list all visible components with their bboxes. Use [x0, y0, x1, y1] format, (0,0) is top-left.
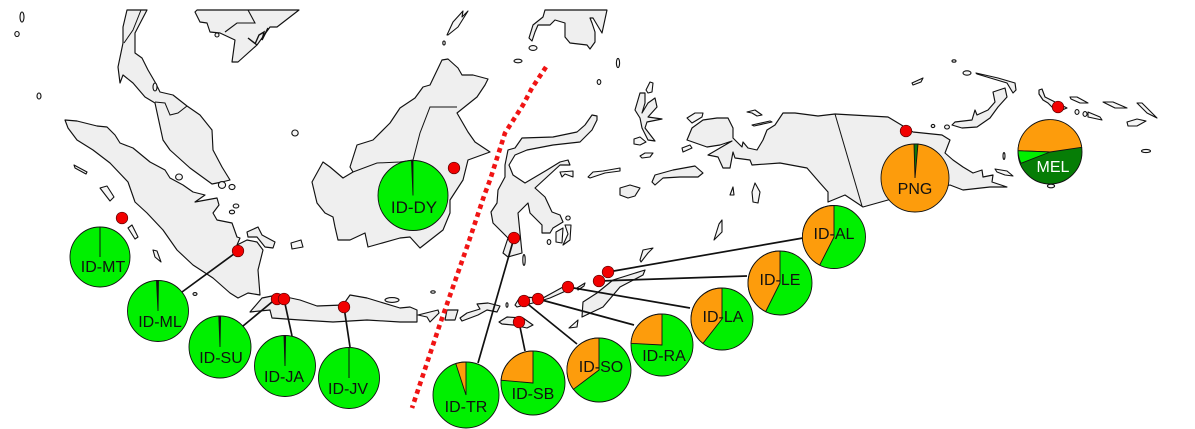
Buton	[563, 225, 571, 245]
pie: ID-TR	[433, 362, 499, 428]
small islands	[15, 11, 1157, 328]
Togian	[560, 171, 573, 177]
Sumatra	[65, 120, 263, 298]
Mindanao	[529, 10, 607, 49]
pie: PNG	[881, 144, 949, 212]
Morotai	[646, 82, 653, 93]
Waigeo	[687, 113, 703, 123]
Indochina border	[225, 10, 255, 32]
Solomon B	[1103, 102, 1127, 108]
Malay Peninsula	[118, 10, 230, 184]
pie: ID-SB	[501, 351, 565, 415]
New Ireland	[976, 73, 1016, 93]
pie: ID-MT: ID-MT	[81, 259, 125, 276]
sampling site markers	[116, 101, 1064, 328]
Solomon A	[1070, 97, 1088, 103]
pie: ID-TR: ID-TR	[445, 399, 487, 416]
Obi	[640, 153, 653, 158]
connector lines	[182, 238, 803, 363]
Simeulue	[74, 165, 87, 174]
Rote	[569, 320, 578, 328]
pie: ID-SO	[567, 338, 631, 402]
Burma border	[124, 10, 141, 43]
pie: ID-RA	[631, 314, 693, 376]
Mekong delta	[248, 28, 268, 45]
Melanesia main island	[1039, 89, 1067, 112]
Flores	[515, 287, 568, 307]
pie: ID-JA: ID-JA	[264, 369, 304, 386]
pie: ID-RA: ID-RA	[642, 348, 686, 365]
eastern islets	[931, 60, 1150, 188]
Sumba	[499, 317, 533, 328]
Borneo	[312, 59, 490, 248]
Palawan	[447, 11, 468, 35]
pie: ID-ML: ID-ML	[138, 314, 182, 331]
pie: ID-JA	[254, 336, 316, 396]
New Guinea	[687, 113, 1007, 207]
western islets	[15, 12, 298, 136]
Lombok	[445, 310, 458, 320]
Solomon C	[1137, 103, 1157, 118]
pie: ID-LA	[691, 288, 753, 350]
Bangka	[247, 227, 275, 248]
Borneo border	[353, 107, 457, 172]
Sula	[588, 168, 620, 178]
pie: ID-ML	[128, 280, 188, 342]
Indochina	[195, 10, 299, 62]
Wetar	[640, 248, 653, 262]
Solomon E	[1088, 112, 1102, 120]
Yapen	[752, 121, 772, 126]
pie: MEL: MEL	[1037, 159, 1070, 176]
Java	[250, 295, 417, 322]
pie: ID-SU	[189, 316, 251, 378]
pie: PNG: PNG	[898, 181, 932, 198]
base map	[15, 10, 1157, 328]
Bali	[418, 310, 439, 322]
pie: MEL	[1018, 120, 1082, 184]
Wallace line	[412, 67, 546, 408]
Solomon D	[1127, 119, 1146, 126]
pie: ID-JV	[318, 347, 380, 408]
pie: ID-LA: ID-LA	[703, 309, 744, 326]
pie: ID-LE: ID-LE	[760, 272, 800, 289]
Alor	[577, 283, 585, 290]
pie: ID-MT	[70, 227, 130, 287]
Trobriand	[995, 169, 1013, 176]
pie: ID-JV: ID-JV	[328, 381, 368, 398]
pie: ID-SO: ID-SO	[579, 359, 623, 376]
Muna	[556, 228, 563, 243]
Aru	[752, 183, 760, 203]
pie: ID-LE	[748, 251, 812, 315]
Belitung	[291, 240, 303, 249]
Sulawesi	[491, 115, 597, 257]
Manus	[912, 78, 923, 85]
Seram	[652, 166, 703, 185]
central islets	[385, 41, 620, 307]
pie: ID-AL: ID-AL	[814, 226, 855, 243]
Riau islets	[176, 174, 239, 295]
Siberut	[128, 225, 138, 239]
Biak	[747, 110, 762, 116]
Papua border	[835, 114, 862, 206]
pie: ID-DY: ID-DY	[391, 198, 437, 217]
Timor	[582, 270, 645, 317]
Buru	[620, 185, 640, 198]
New Britain	[952, 88, 1007, 128]
pie: ID-DY	[378, 160, 448, 230]
Tanimbar	[714, 220, 722, 240]
pie: ID-SB: ID-SB	[512, 386, 554, 403]
Misool	[682, 145, 692, 152]
Thai-Malay border	[155, 102, 187, 115]
Halmahera	[635, 93, 662, 141]
Nias	[100, 186, 114, 201]
Pagai	[153, 250, 161, 262]
landmasses	[65, 10, 1067, 328]
Kai	[730, 187, 734, 195]
Sumbawa	[460, 303, 500, 321]
pie: ID-SU: ID-SU	[199, 350, 243, 367]
Bacan	[634, 137, 646, 145]
pie: ID-AL	[802, 205, 866, 268]
